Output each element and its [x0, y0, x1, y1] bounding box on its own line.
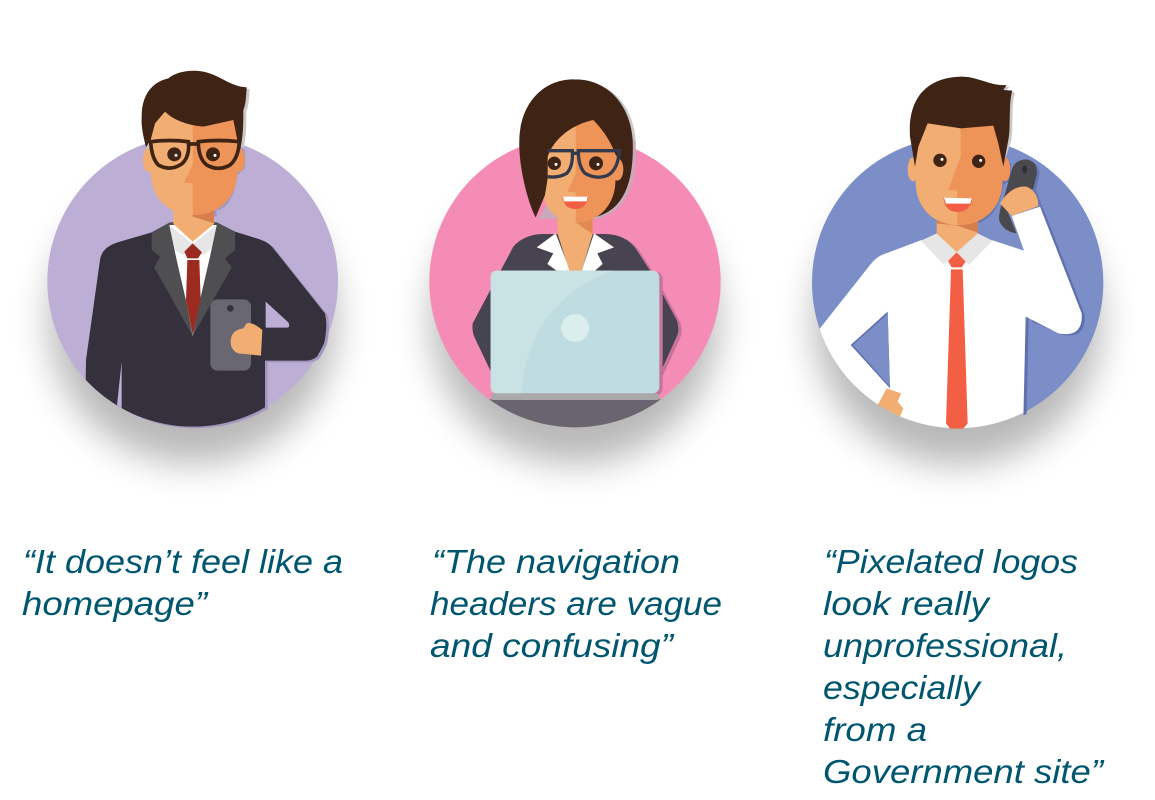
quote 2: headers are vague [430, 586, 722, 623]
quote 2 [430, 544, 722, 665]
blouse collar [537, 233, 614, 271]
quote 3: especially [823, 670, 982, 707]
neck shading [937, 217, 978, 233]
laptop highlight [491, 271, 613, 393]
pink circle background [429, 136, 721, 427]
lapels [152, 222, 235, 336]
gap under raised arm [266, 302, 289, 328]
hair [142, 71, 247, 147]
ear [611, 158, 623, 181]
face [544, 118, 617, 222]
glasses [548, 151, 619, 177]
quote 3 [823, 544, 1105, 791]
laptop logo [561, 314, 589, 342]
quote 3: unprofessional, [823, 628, 1067, 665]
shirt shadow [1024, 208, 1085, 416]
neck shading [193, 207, 214, 223]
smile [943, 198, 973, 212]
white shirt [820, 206, 1082, 428]
eyes [167, 147, 220, 161]
gap between arm and torso [117, 362, 122, 409]
face shaded half [948, 120, 1002, 225]
left ear [143, 148, 154, 172]
laptop lid [491, 271, 659, 393]
hair shadow [144, 72, 250, 149]
jacket [85, 222, 326, 427]
quote 1: “It doesn’t feel like a [23, 544, 343, 581]
face shaded half [567, 119, 617, 222]
face [916, 120, 1002, 225]
eyes [933, 154, 985, 168]
figure: man in white shirt on phone [795, 77, 1103, 465]
quote 3: look really [823, 586, 991, 623]
desk [489, 399, 661, 428]
glasses [151, 140, 239, 168]
shirt [169, 225, 217, 336]
hand [231, 323, 262, 356]
quote 1 [22, 544, 343, 623]
blue circle background [812, 137, 1103, 428]
left ear [908, 157, 918, 181]
quote 2: “The navigation [432, 544, 680, 581]
figure: woman with laptop [427, 79, 727, 464]
laptop base [491, 393, 659, 400]
collar [921, 233, 992, 265]
shirt collar [169, 225, 217, 255]
neck [558, 217, 593, 271]
phone hand [1000, 187, 1038, 216]
arm hole [853, 314, 890, 387]
coral tie [946, 252, 968, 429]
figure: man in suit with smartphone [47, 71, 338, 463]
front hair [519, 79, 633, 217]
face [151, 110, 237, 215]
jacket [472, 234, 678, 373]
right ear [1000, 157, 1010, 181]
purple circle background [47, 136, 338, 427]
lower hand [878, 388, 903, 417]
hair shadow [964, 78, 1015, 162]
neck [937, 217, 978, 252]
right ear [234, 148, 245, 172]
quote 3: “Pixelated logos [824, 544, 1078, 581]
head shadow [962, 157, 1011, 223]
smartphone [210, 299, 251, 371]
smile [562, 197, 588, 209]
circle drop shadow [814, 178, 1101, 465]
phone shadow [1028, 161, 1043, 211]
quote 3: Government site” [823, 754, 1105, 791]
eyes [548, 156, 603, 170]
face shaded half [184, 110, 237, 215]
quote 2: and confusing” [430, 628, 675, 665]
circle drop shadow [49, 177, 336, 463]
hair grey shadow above circle [597, 84, 636, 142]
arm hole edge [851, 312, 890, 388]
body shadow [115, 244, 329, 428]
head shadow [190, 143, 245, 217]
body shadow [476, 236, 682, 375]
red tie [184, 243, 202, 335]
quote 3: from a [823, 712, 927, 749]
neck [173, 207, 214, 242]
phone [999, 159, 1037, 233]
quote 1: homepage” [22, 586, 209, 623]
back hair [577, 79, 633, 217]
hair shadow [539, 82, 636, 219]
laptop shadow [493, 272, 663, 395]
neck shading [576, 217, 593, 234]
circle drop shadow [432, 177, 718, 464]
hair [910, 77, 1012, 167]
